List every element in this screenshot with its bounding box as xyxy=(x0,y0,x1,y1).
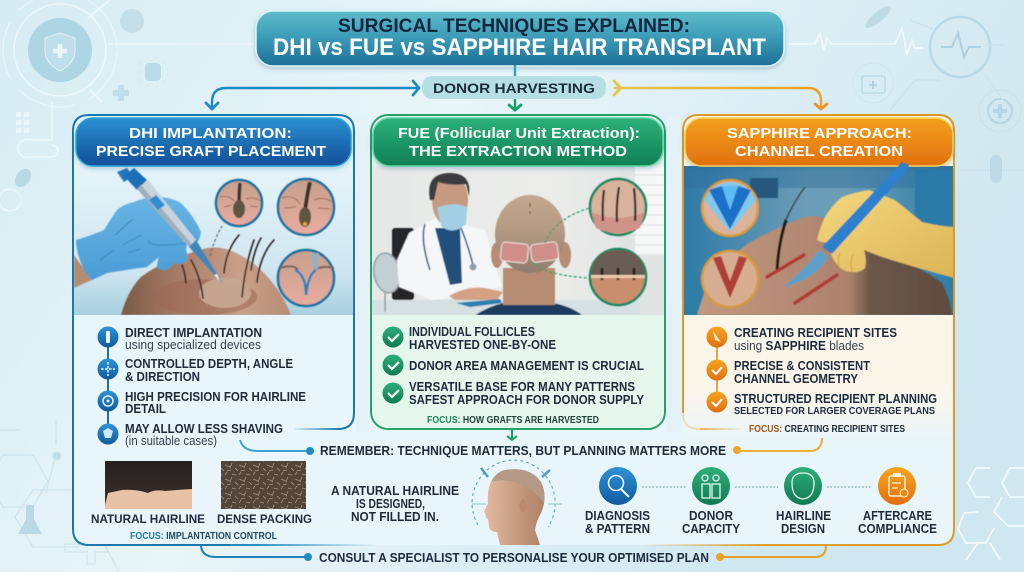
Sapphire bullet text: PRECISE & CONSISTENT xyxy=(734,359,870,373)
Sapphire header: CHANNEL CREATION xyxy=(735,143,903,160)
step: aftercare: AFTERCARE xyxy=(863,509,932,523)
DHI bullet text: DETAIL xyxy=(125,402,166,416)
DHI bullet text: MAY ALLOW LESS SHAVING xyxy=(125,422,283,436)
arrow: to Sapphire xyxy=(614,81,827,109)
step: aftercare xyxy=(858,467,937,536)
FUE bullet text xyxy=(409,325,645,407)
planning steps xyxy=(585,467,937,536)
arrow: to DHI xyxy=(206,81,419,109)
DHI bullet text: CONTROLLED DEPTH, ANGLE xyxy=(125,357,293,371)
step: diagnosis: & PATTERN xyxy=(585,522,650,536)
FUE header: THE EXTRACTION METHOD xyxy=(409,143,627,160)
scalpel tip over header xyxy=(888,162,909,184)
image labels xyxy=(91,512,312,526)
DHI bullet text: HIGH PRECISION FOR HAIRLINE xyxy=(125,390,306,404)
DHI bullet icons xyxy=(98,326,118,444)
inset circles xyxy=(216,179,334,306)
arrows from donor pill xyxy=(206,66,827,110)
remember connector and text xyxy=(240,438,822,458)
panel: Sapphire xyxy=(684,116,954,445)
step: donor capacity: CAPACITY xyxy=(682,522,741,536)
arrow under FUE xyxy=(507,429,517,440)
step: hairline design: DESIGN xyxy=(781,522,825,536)
focus: harvesting: FOCUS: HOW GRAFTS ARE HARVESTED xyxy=(427,415,599,426)
Sapphire bullet text: SELECTED FOR LARGER COVERAGE PLANS xyxy=(734,406,935,417)
Sapphire header xyxy=(685,118,953,166)
title banner xyxy=(256,11,784,66)
panel: FUE xyxy=(371,115,665,429)
DHI bullet text: using specialized devices xyxy=(125,338,261,352)
FUE bullet text: INDIVIDUAL FOLLICLES xyxy=(409,325,535,339)
consult connector and text: CONSULT A SPECIALIST TO PERSONALISE YOUR OPTIMISED PLAN xyxy=(319,550,709,565)
DHI header: DHI IMPLANTATION: xyxy=(129,125,292,142)
step: diagnosis xyxy=(585,467,650,536)
image labels: NATURAL HAIRLINE xyxy=(91,512,205,526)
Sapphire header: SAPPHIRE APPROACH: xyxy=(727,125,912,142)
FUE header: FUE (Follicular Unit Extraction): xyxy=(398,125,640,142)
DHI bullet text: & DIRECTION xyxy=(125,370,200,384)
FUE bullet text: SAFEST APPROACH FOR DONOR SUPPLY xyxy=(409,393,645,407)
FUE bullet text: DONOR AREA MANAGEMENT IS CRUCIAL xyxy=(409,359,644,373)
step: diagnosis: DIAGNOSIS xyxy=(585,509,650,523)
Sapphire bullet text: STRUCTURED RECIPIENT PLANNING xyxy=(734,392,937,406)
decorative medical icons left xyxy=(0,0,254,211)
Sapphire bullet text: CREATING RECIPIENT SITES xyxy=(734,326,897,340)
DHI bullet text xyxy=(125,326,306,448)
illustration: sapphire blade xyxy=(684,162,954,315)
step: donor capacity: DONOR xyxy=(689,509,733,523)
DHI header: PRECISE GRAFT PLACEMENT xyxy=(96,143,326,160)
hairline quote xyxy=(331,484,459,524)
panel: DHI xyxy=(73,115,354,545)
DHI header xyxy=(76,118,351,166)
hairline quote: IS DESIGNED, xyxy=(356,497,425,511)
focus: implantation control: FOCUS: IMPLANTATION CONTROL xyxy=(130,531,277,542)
Sapphire bullet icons xyxy=(706,326,728,412)
decorative hexagons left xyxy=(0,420,119,572)
arrow: to FUE xyxy=(509,66,521,110)
Sapphire bullet text: using SAPPHIRE blades xyxy=(734,339,864,353)
focus: recipient sites: FOCUS: CREATING RECIPIENT SITES xyxy=(749,424,905,435)
hairline quote: NOT FILLED IN. xyxy=(351,510,439,524)
panel outline strokes xyxy=(73,115,954,545)
photo: natural hairline xyxy=(105,461,192,509)
Sapphire bullet text: CHANNEL GEOMETRY xyxy=(734,372,859,386)
illustration: DHI implant pen xyxy=(74,166,353,315)
step: hairline design xyxy=(776,467,831,536)
donor harvesting pill: DONOR HARVESTING xyxy=(433,80,595,96)
image labels: DENSE PACKING xyxy=(217,512,312,526)
head profile xyxy=(472,460,562,545)
Sapphire bullet text xyxy=(734,326,937,417)
FUE header xyxy=(373,118,663,166)
doctor xyxy=(397,218,502,300)
step: hairline design: HAIRLINE xyxy=(776,509,831,523)
background strip between panels xyxy=(356,117,681,432)
title line 1: SURGICAL TECHNIQUES EXPLAINED: xyxy=(338,16,690,37)
donor harvesting pill xyxy=(422,76,606,99)
hairline quote: A NATURAL HAIRLINE xyxy=(331,484,459,498)
lower shared panel xyxy=(73,300,954,545)
photo: dense packing xyxy=(221,461,306,509)
patient xyxy=(475,303,582,315)
remember connector and text: REMEMBER: TECHNIQUE MATTERS, BUT PLANNING MATTERS MORE xyxy=(320,443,726,458)
title line 2: DHI vs FUE vs SAPPHIRE HAIR TRANSPLANT xyxy=(273,34,766,61)
DHI bullet text: DIRECT IMPLANTATION xyxy=(125,326,262,340)
decorative medical icons right xyxy=(788,3,1024,183)
consult connector and text xyxy=(201,546,826,565)
FUE bullet text: HARVESTED ONE-BY-ONE xyxy=(409,338,556,352)
step: donor capacity xyxy=(682,467,741,536)
illustration: FUE consultation xyxy=(371,166,665,315)
step: aftercare: COMPLIANCE xyxy=(858,522,937,536)
FUE check icons xyxy=(382,326,404,404)
FUE bullet text: VERSATILE BASE FOR MANY PATTERNS xyxy=(409,380,635,394)
DHI bullet text: (in suitable cases) xyxy=(125,434,217,448)
decorative hexagons right xyxy=(958,468,1024,560)
